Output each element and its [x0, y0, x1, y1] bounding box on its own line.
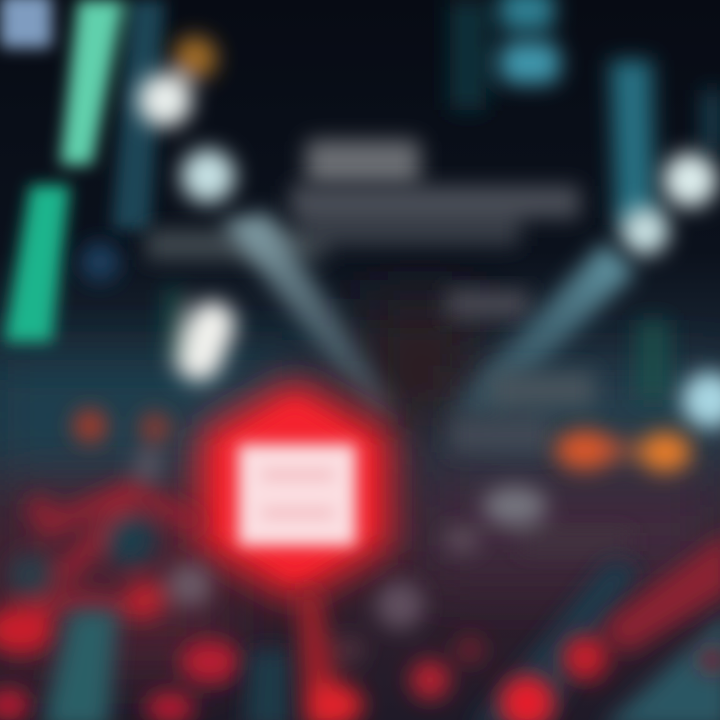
red warning hexagon glow [198, 378, 392, 602]
dark teal column [450, 0, 486, 110]
red network lower left [0, 409, 240, 720]
pale node [181, 149, 235, 203]
left column bars [0, 0, 165, 342]
white capsule [169, 294, 242, 388]
text block: subtitle [146, 186, 580, 260]
bright green bar [60, 0, 124, 165]
green bar lower [4, 185, 70, 342]
right edge column [704, 90, 720, 150]
orange node [173, 36, 217, 80]
icon: pale blue block [0, 0, 52, 48]
teal pillars bottom [42, 560, 720, 720]
teal bar [112, 0, 165, 230]
right lower text blur [444, 486, 630, 552]
red network lower centre and right [298, 530, 720, 720]
arrow: right light beam [450, 242, 636, 424]
green stub [166, 290, 184, 360]
red warning hexagon [222, 402, 368, 578]
green column right [636, 320, 670, 400]
left nodes [80, 36, 242, 388]
ambient background glows [0, 300, 720, 670]
blue node [80, 242, 120, 282]
teal top block lower [500, 42, 560, 84]
text block: small caption [446, 290, 530, 318]
right middle text blur [450, 372, 595, 452]
text block: heading [306, 140, 420, 186]
right nodes [621, 153, 720, 428]
white node upper [138, 73, 192, 127]
arrow: left light beam [222, 212, 398, 420]
teal top block [500, 0, 554, 30]
orange labels [555, 430, 691, 472]
teal right bar [610, 60, 654, 225]
right top bars [450, 0, 720, 400]
white square icon [238, 444, 356, 546]
